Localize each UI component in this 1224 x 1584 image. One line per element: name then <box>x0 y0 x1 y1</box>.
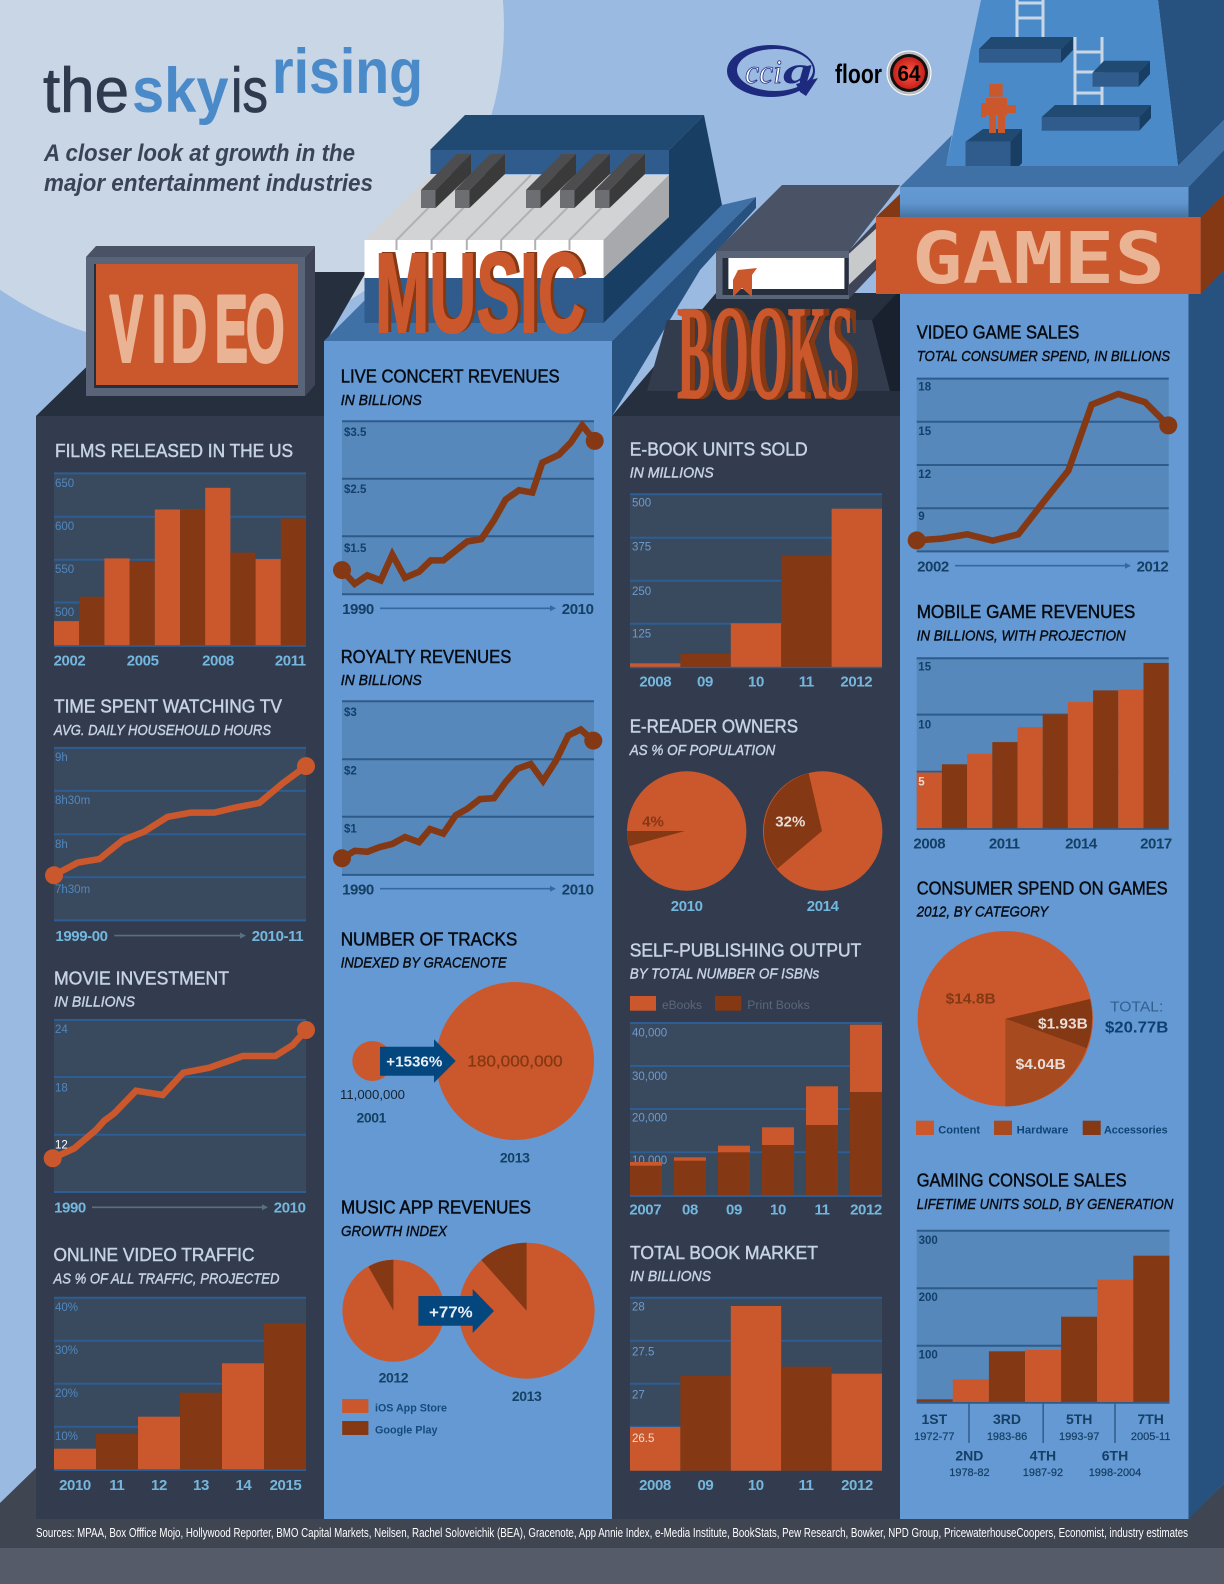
title: the <box>43 56 129 126</box>
logo: floor 64 <box>835 51 931 95</box>
generation years: 1972-77 <box>914 1431 954 1443</box>
chart: time spent watching tv <box>45 697 315 945</box>
chart: online video traffic: 13 <box>193 1477 209 1494</box>
chart: e-reader owners: 4% <box>642 814 664 831</box>
platforms <box>966 37 1151 175</box>
chart: video game sales: 15 <box>918 426 932 438</box>
generation years: 1983-86 <box>987 1431 1027 1443</box>
games side and top <box>900 120 1224 1519</box>
legend: app stores <box>342 1399 447 1436</box>
video roof <box>36 272 366 416</box>
chart: e-book units sold: 2012 <box>840 674 872 691</box>
chart: online video traffic: 14 <box>235 1477 252 1494</box>
chart: video game sales: 9 <box>918 511 925 523</box>
generation years: 1993-97 <box>1059 1431 1099 1443</box>
chart: films released: 550 <box>55 564 74 576</box>
chart: royalty revenues <box>333 647 602 898</box>
chart: online video traffic: 11 <box>109 1477 124 1494</box>
chart: total book market: 10 <box>748 1477 764 1494</box>
title <box>43 37 423 126</box>
chart: consumer spend on games: TOTAL: <box>1110 999 1163 1016</box>
chart: royalty revenues: IN BILLIONS <box>341 672 422 689</box>
chart: e-reader owners: 2014 <box>807 898 840 915</box>
chart: music app revenues <box>341 1197 595 1436</box>
chart: time spent watching tv: 2010-11 <box>252 928 303 945</box>
arrow: +1536%: +1536% <box>386 1054 442 1071</box>
chart: self-publishing output: 30,000 <box>632 1071 667 1083</box>
heading: films released: FILMS RELEASED IN THE US <box>55 441 293 461</box>
title: sky <box>132 56 228 126</box>
chart: films released: 2011 <box>275 653 306 670</box>
heading: music: MUSIC <box>378 229 588 355</box>
subtitle: A closer look at growth in the <box>43 140 355 167</box>
books roof <box>612 290 900 416</box>
chart: mobile game revenues: 2017 <box>1140 836 1172 853</box>
chart: films released: 2005 <box>127 653 159 670</box>
chart: online video traffic: 40% <box>55 1302 78 1314</box>
generation labels: 2ND <box>955 1448 983 1464</box>
chart: live concert revenues <box>333 367 604 618</box>
chart: movie investment: 12 <box>55 1140 68 1152</box>
chart: consumer spend on games: $14.8B <box>946 990 996 1007</box>
legend: spend categories: Hardware <box>1017 1124 1068 1136</box>
chart: self-publishing output <box>629 941 882 1218</box>
panel: music <box>324 341 612 1519</box>
title: rising <box>272 37 423 107</box>
generation years: 1978-82 <box>949 1467 990 1479</box>
icon: pixel figure <box>981 84 1016 133</box>
legend: book types: eBooks <box>662 1000 702 1012</box>
chart: number of tracks: INDEXED BY GRACENOTE <box>341 955 508 972</box>
generation labels: 5TH <box>1066 1411 1092 1427</box>
heading: live concert revenues: LIVE CONCERT REVENUES <box>341 367 560 387</box>
chart: e-book units sold: 09 <box>697 674 713 691</box>
generation labels: 4TH <box>1030 1448 1056 1464</box>
chart: online video traffic: AS % OF ALL TRAFFIC, PROJECTED <box>53 1270 280 1287</box>
chart: live concert revenues: 1990 <box>342 601 374 618</box>
chart: self-publishing output: 09 <box>726 1201 742 1218</box>
chart: time spent watching tv: 8h <box>55 839 68 851</box>
generation labels: 1ST <box>921 1411 948 1427</box>
chart: video game sales: 2012 <box>1137 558 1168 575</box>
heading: royalty revenues: ROYALTY REVENUES <box>341 647 511 667</box>
chart: royalty revenues: $3 <box>344 707 357 719</box>
heading: e-book units sold: E-BOOK UNITS SOLD <box>630 440 808 460</box>
chart: online video traffic: 30% <box>55 1345 78 1357</box>
chart: total book market: 11 <box>798 1477 814 1494</box>
generation labels: 7TH <box>1137 1411 1164 1427</box>
chart: self-publishing output: 10,000 <box>632 1155 667 1167</box>
heading: number of tracks: NUMBER OF TRACKS <box>341 929 517 949</box>
chart: self-publishing output: BY TOTAL NUMBER OF ISBNs <box>630 966 820 983</box>
arrow: +77%: +77% <box>429 1304 473 1321</box>
games tower scene <box>946 0 1224 175</box>
chart: films released: 2008 <box>202 653 234 670</box>
chart: e-book units sold: 250 <box>632 586 651 598</box>
chart: music app revenues: 2013 <box>512 1388 542 1404</box>
icon: music keyboard <box>364 115 722 323</box>
chart: films released: 650 <box>55 478 74 490</box>
heading: books <box>677 279 860 428</box>
chart: video game sales <box>908 323 1177 575</box>
generation years: 2005-11 <box>1131 1431 1170 1443</box>
heading: music <box>375 229 588 356</box>
chart: mobile game revenues: IN BILLIONS, WITH PROJECTION <box>917 627 1126 644</box>
logo: floor 64: 64 <box>898 61 921 86</box>
chart: e-book units sold: IN MILLIONS <box>630 465 714 482</box>
generation labels: 3RD <box>993 1411 1021 1427</box>
chart: e-book units sold <box>630 440 882 691</box>
chart: movie investment: 18 <box>55 1082 68 1094</box>
chart: royalty revenues: $1 <box>344 824 357 836</box>
chart: films released: 600 <box>55 521 74 533</box>
chart: e-book units sold: 10 <box>748 674 764 691</box>
generation years: 1998-2004 <box>1089 1467 1141 1479</box>
chart: gaming console sales: LIFETIME UNITS SOLD, BY GENERATION <box>917 1196 1173 1213</box>
chart: video game sales: 12 <box>918 469 931 481</box>
chart: self-publishing output: 08 <box>682 1201 698 1218</box>
heading: e-reader owners: E-READER OWNERS <box>630 717 798 737</box>
chart: mobile game revenues: 5 <box>918 777 925 789</box>
heading: movie investment: MOVIE INVESTMENT <box>54 969 229 989</box>
legend: app stores: iOS App Store <box>375 1402 447 1414</box>
chart: total book market: 09 <box>697 1477 713 1494</box>
chart: online video traffic <box>53 1245 306 1494</box>
chart: movie investment: IN BILLIONS <box>54 994 135 1011</box>
chart: video game sales: TOTAL CONSUMER SPEND, IN BILLIONS <box>917 348 1170 365</box>
chart: music app revenues: 2012 <box>379 1370 409 1386</box>
chart: self-publishing output: 11 <box>814 1201 830 1218</box>
pale sun circle <box>0 0 504 347</box>
heading: music app revenues: MUSIC APP REVENUES <box>341 1197 531 1217</box>
chart: self-publishing output: 2007 <box>629 1201 661 1218</box>
legend: book types <box>630 996 810 1012</box>
chart: e-reader owners: 2010 <box>671 898 703 915</box>
panel: books <box>612 416 900 1519</box>
chart: number of tracks: 2001 <box>357 1110 387 1126</box>
chart: live concert revenues: 2010 <box>562 601 594 618</box>
icon: video television <box>86 246 315 396</box>
chart: time spent watching tv: 1999-00 <box>55 928 108 945</box>
chart: time spent watching tv: 9h <box>55 752 68 764</box>
legend: book types: Print Books <box>747 1000 810 1012</box>
chart: consumer spend on games: $4.04B <box>1016 1056 1066 1073</box>
heading: time spent watching tv: TIME SPENT WATCHING TV <box>54 697 282 717</box>
chart: films released <box>54 441 306 670</box>
icon: bookmark <box>733 268 757 297</box>
chart: online video traffic: 12 <box>151 1477 167 1494</box>
black keys <box>421 154 645 208</box>
ground footer band <box>0 1468 1224 1584</box>
chart: e-reader owners: AS % OF POPULATION <box>629 742 775 759</box>
heading: consumer spend on games: CONSUMER SPEND ON GAMES <box>917 878 1168 898</box>
chart: video game sales: 2002 <box>917 558 949 575</box>
panel: video <box>36 416 324 1519</box>
chart: self-publishing output: 2012 <box>850 1201 882 1218</box>
chart: mobile game revenues: 15 <box>918 662 932 674</box>
generation labels <box>921 1411 1164 1464</box>
generation years <box>914 1431 1170 1479</box>
chart: live concert revenues: IN BILLIONS <box>341 392 422 409</box>
chart: mobile game revenues: 2014 <box>1065 836 1098 853</box>
chart: e-reader owners <box>627 717 882 915</box>
chart: mobile game revenues: 2008 <box>913 836 945 853</box>
chart: self-publishing output: 40,000 <box>632 1028 667 1040</box>
title: is <box>231 56 268 126</box>
chart: total book market: 27.5 <box>632 1346 654 1358</box>
logo: ccia <box>727 45 818 97</box>
chart: music app revenues: GROWTH INDEX <box>341 1223 448 1240</box>
chart: royalty revenues: $2 <box>344 765 357 777</box>
arrow: +1536% <box>380 1039 456 1083</box>
heading banner: games <box>876 194 1224 300</box>
panel: games charts <box>908 323 1177 1479</box>
chart: movie investment: 1990 <box>54 1200 86 1217</box>
text: BOOKS <box>682 279 860 428</box>
chart: total book market: IN BILLIONS <box>630 1268 711 1285</box>
chart: mobile game revenues: 10 <box>918 720 931 732</box>
heading: online video traffic: ONLINE VIDEO TRAFFIC <box>54 1245 254 1265</box>
subtitle: major entertainment industries <box>44 170 373 197</box>
chart: gaming console sales <box>914 1171 1173 1479</box>
logo: ccia: cci <box>745 54 782 91</box>
generation labels: 6TH <box>1102 1448 1128 1464</box>
chart: number of tracks <box>340 929 594 1166</box>
chart: time spent watching tv: AVG. DAILY HOUSEHOULD HOURS <box>53 722 271 739</box>
chart: movie investment: 2010 <box>274 1200 306 1217</box>
generation years: 1987-92 <box>1023 1467 1063 1479</box>
heading: gaming console sales: GAMING CONSOLE SALES <box>917 1171 1127 1191</box>
chart: number of tracks: 180,000,000 <box>467 1054 563 1071</box>
chart: consumer spend on games: 2012, BY CATEGORY <box>916 904 1049 921</box>
heading: video: VIDEO <box>110 276 284 381</box>
icon: book <box>716 185 900 299</box>
chart: gaming console sales: 200 <box>919 1292 938 1304</box>
chart: e-book units sold: 125 <box>632 629 651 641</box>
chart: self-publishing output: 20,000 <box>632 1113 667 1125</box>
chart: number of tracks: 2013 <box>500 1150 530 1166</box>
chart: gaming console sales: 300 <box>919 1235 938 1247</box>
heading banner: games: GAMES <box>912 217 1165 300</box>
legend: app stores: Google Play <box>375 1424 438 1436</box>
chart: total book market: 28 <box>632 1301 645 1313</box>
chart: total book market: 2012 <box>841 1477 873 1494</box>
chart: movie investment <box>44 969 315 1217</box>
chart: total book market <box>630 1243 882 1494</box>
chart: e-book units sold: 2008 <box>639 674 671 691</box>
chart: live concert revenues: $2.5 <box>344 484 367 496</box>
arrow: +77% <box>418 1289 494 1333</box>
chart: number of tracks: 11,000,000 <box>340 1087 405 1102</box>
logo: ccia: a <box>783 50 813 92</box>
heading: music: MUSIC <box>375 230 585 356</box>
heading: total book market: TOTAL BOOK MARKET <box>630 1243 818 1263</box>
chart: e-book units sold: 375 <box>632 542 651 554</box>
legend: spend categories <box>916 1121 1168 1136</box>
chart: online video traffic: 2015 <box>270 1477 301 1494</box>
chart: e-book units sold: 500 <box>632 498 651 510</box>
chart: online video traffic: 2010 <box>59 1477 91 1494</box>
chart: consumer spend on games: $20.77B <box>1105 1020 1168 1037</box>
heading: self-publishing output: SELF-PUBLISHING OUTPUT <box>630 941 861 961</box>
logo: floor 64: floor <box>835 59 882 89</box>
chart: total book market: 27 <box>632 1389 645 1401</box>
chart: consumer spend on games: $1.93B <box>1038 1016 1088 1033</box>
chart: total book market: 26.5 <box>632 1433 654 1445</box>
chart: online video traffic: 20% <box>55 1388 78 1400</box>
chart: time spent watching tv: 8h30m <box>55 795 90 807</box>
music column roof and side <box>324 197 756 416</box>
chart: live concert revenues: $3.5 <box>344 427 367 439</box>
heading: mobile game revenues: MOBILE GAME REVENUES <box>917 602 1135 622</box>
panel: games front <box>900 187 1188 1519</box>
chart: e-book units sold: 11 <box>799 674 814 691</box>
legend: spend categories: Content <box>938 1124 980 1136</box>
chart: films released: 500 <box>55 607 74 619</box>
chart: royalty revenues: 2010 <box>562 882 594 898</box>
chart: movie investment: 24 <box>55 1024 68 1036</box>
chart: mobile game revenues <box>913 602 1172 853</box>
ladders <box>1017 0 1102 107</box>
chart: consumer spend on games <box>916 878 1168 1136</box>
chart: e-reader owners: 32% <box>775 814 805 831</box>
legend: spend categories: Accessories <box>1104 1124 1168 1136</box>
chart: time spent watching tv: 7h30m <box>55 884 90 896</box>
chart: video game sales: 18 <box>918 382 932 394</box>
subtitle <box>43 140 373 197</box>
chart: online video traffic: 10% <box>55 1431 78 1443</box>
chart: self-publishing output: 10 <box>770 1201 786 1218</box>
chart: total book market: 2008 <box>639 1477 671 1494</box>
chart: mobile game revenues: 2011 <box>989 836 1020 853</box>
text: BOOKS <box>677 279 854 428</box>
chart: films released: 2002 <box>54 653 85 670</box>
heading: video game sales: VIDEO GAME SALES <box>917 323 1079 343</box>
chart: live concert revenues: $1.5 <box>344 543 367 555</box>
chart: gaming console sales: 100 <box>919 1350 938 1362</box>
chart: royalty revenues: 1990 <box>342 882 374 898</box>
